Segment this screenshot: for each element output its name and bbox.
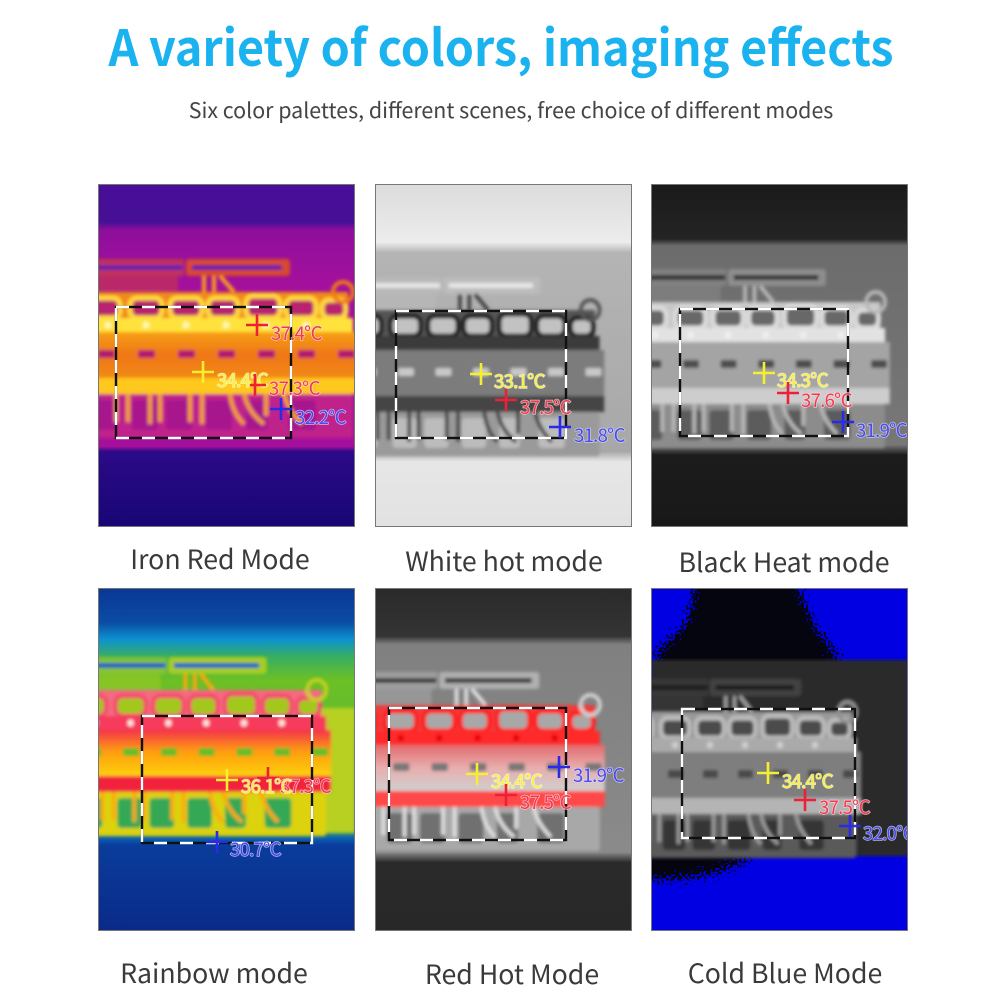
caption: red hot: Red Hot Mode [425,953,599,992]
measurement box [389,708,566,840]
caption: black heat: Black Heat mode [678,541,890,580]
thermal scene: iron red palette [48,184,358,527]
title: A variety of colors, imaging effects [108,9,894,81]
marker: red 37.6 [777,382,852,413]
panel: iron red mode thermal image [98,184,355,527]
marker: blue 31.8: 31.8℃ [574,422,625,448]
panel: white hot mode thermal image [375,184,632,527]
marker: blue 32.2: 32.2℃ [295,404,346,430]
measurement box [682,709,855,838]
marker: red 37.3 [257,767,331,799]
thermal scene: black heat palette [598,184,908,527]
marker: yellow 34.4: 34.4℃ [782,768,833,794]
marker: red 37.3: 37.3℃ [280,773,331,799]
caption: iron red: Iron Red Mode [130,538,310,577]
marker: yellow 34.4 [757,762,833,794]
marker: yellow 34.4 [192,361,268,393]
measurement box [396,311,566,438]
subtitle: Six color palettes, different scenes, free choice of different modes [189,94,833,125]
marker: blue 32.0 [839,815,914,846]
marker: yellow 36.1: 36.1℃ [241,773,292,799]
marker: blue 31.9: 31.9℃ [573,762,624,788]
marker: red 37.5: 37.5℃ [520,789,571,815]
marker: blue 31.9: 31.9℃ [856,417,907,443]
marker: yellow 33.1 [470,363,545,394]
marker: red 37.5 [794,789,870,820]
measurement box [142,716,312,843]
panel: black heat mode thermal image [651,184,908,527]
caption: rainbow: Rainbow mode [120,952,308,991]
marker: red 37.3 [250,374,320,401]
caption: white hot: White hot mode [405,540,603,579]
marker: blue 32.2 [270,398,346,430]
panel: cold blue mode thermal image [651,588,908,931]
thermal scene: red hot palette [306,588,632,931]
marker: yellow 34.4: 34.4℃ [491,768,542,794]
measurement box [116,307,291,438]
thermal scene: rainbow palette [38,588,355,931]
marker: yellow 34.4 [466,763,542,794]
marker: yellow 34.3 [753,362,828,393]
marker: yellow 34.4: 34.4℃ [217,367,268,393]
marker: yellow 36.1 [216,769,292,799]
marker: blue 30.7: 30.7℃ [230,836,281,862]
thermal scene: white hot palette [314,184,632,527]
marker: blue 30.7 [206,831,281,862]
marker: red 37.5: 37.5℃ [819,794,870,820]
panel: red hot mode thermal image [375,588,632,931]
caption: cold blue: Cold Blue Mode [688,952,882,991]
panel: rainbow mode thermal image [98,588,744,931]
marker: red 37.5: 37.5℃ [520,394,571,420]
measurement box [680,309,848,436]
marker: red 37.5 [495,784,571,815]
thermal scene: cold blue palette [589,548,908,931]
marker: yellow 34.3: 34.3℃ [777,367,828,393]
marker: red 37.3: 37.3℃ [269,375,320,401]
marker: red 37.4: 37.4℃ [271,320,322,346]
marker: blue 31.9 [832,411,907,443]
marker: red 37.5 [495,389,571,420]
marker: red 37.6: 37.6℃ [801,387,852,413]
marker: blue 31.8 [549,416,625,448]
marker: red 37.4 [246,314,322,346]
marker: yellow 33.1: 33.1℃ [494,368,545,394]
marker: blue 31.9 [548,756,624,788]
